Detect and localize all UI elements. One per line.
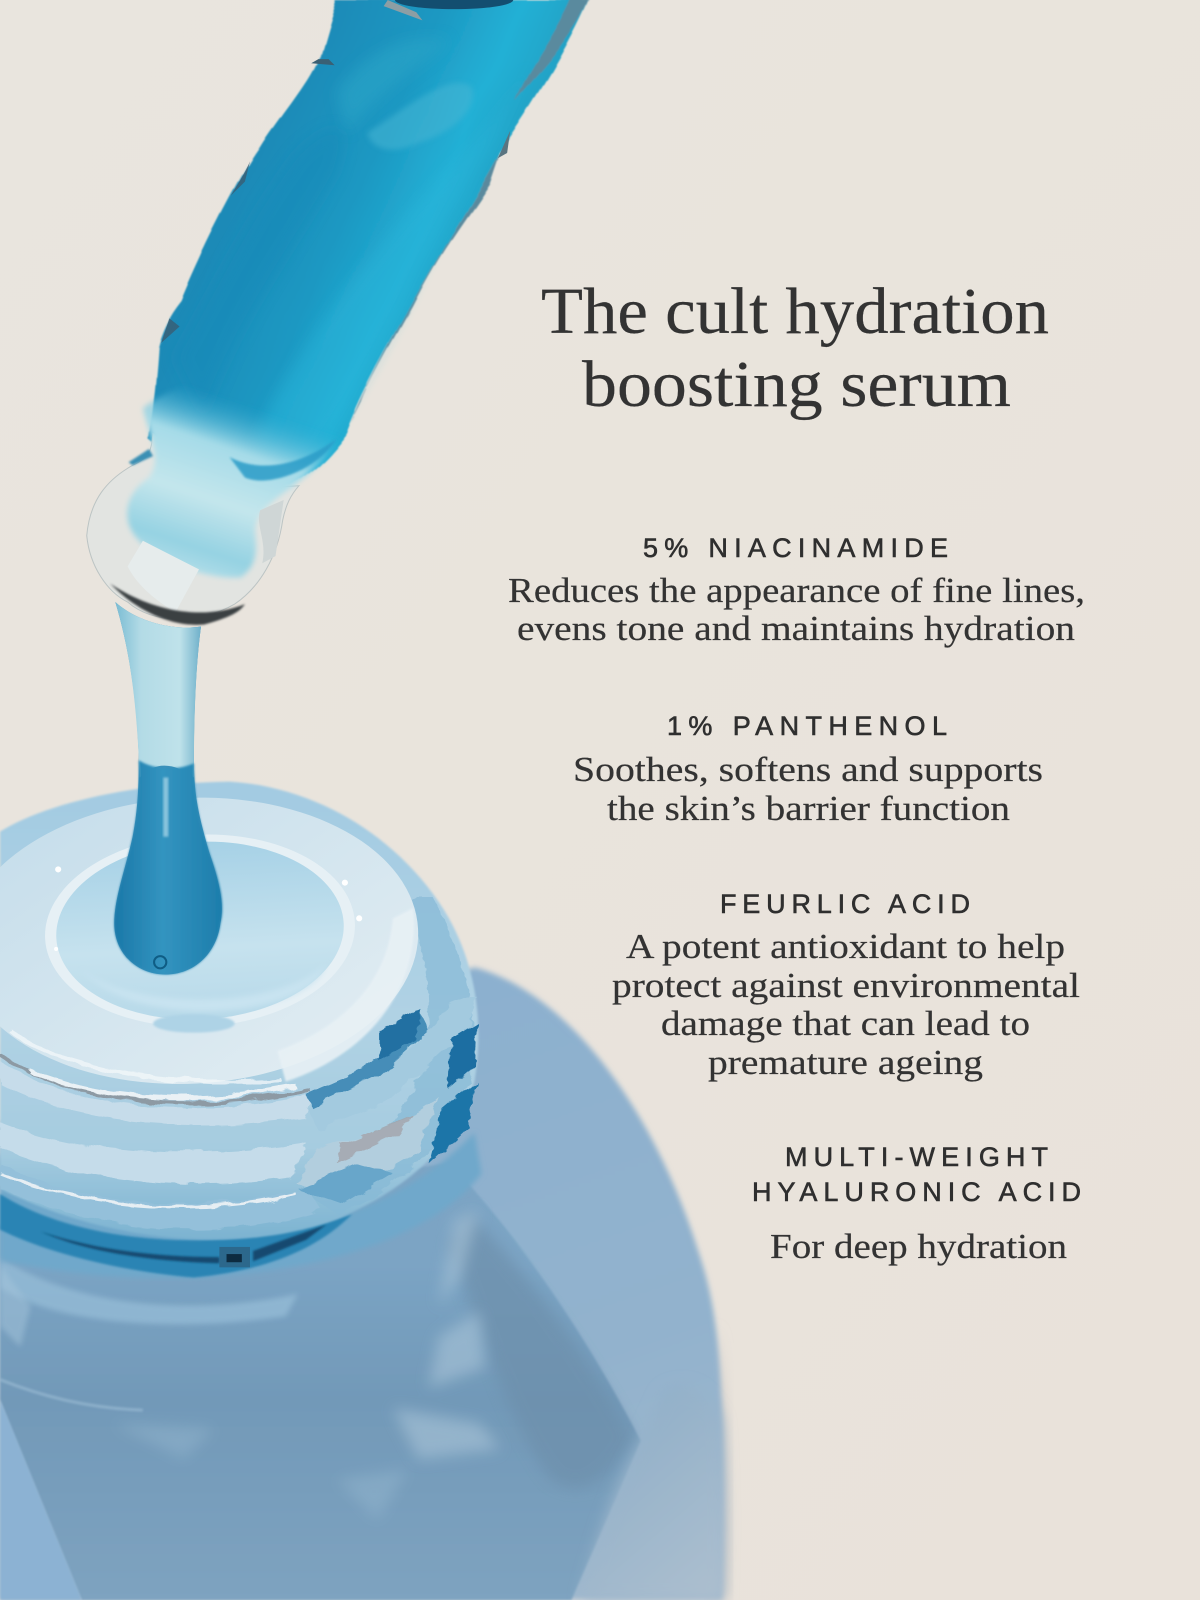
ingredient: ferulic acid [612, 889, 1080, 1082]
title: The cult hydration [541, 275, 1049, 348]
ingredient: multi-weight hyaluronic acid: MULTI-WEIGHT [785, 1142, 1048, 1172]
bottle body [0, 967, 728, 1600]
ingredient: ferulic acid: protect against environmental [612, 966, 1080, 1005]
ingredient: 1% panthenol: the skin’s barrier function [607, 789, 1010, 828]
ingredient: ferulic acid: A potent antioxidant to help [626, 927, 1065, 966]
ingredient: 5% niacinamide: Reduces the appearance of fine lines, [508, 571, 1085, 610]
ingredient: multi-weight hyaluronic acid: HYALURONIC ACID [752, 1177, 1081, 1207]
ingredient: 5% niacinamide: evens tone and maintains hydration [517, 609, 1075, 648]
ingredient: multi-weight hyaluronic acid: For deep hydration [770, 1227, 1067, 1266]
title [541, 275, 1049, 421]
title: boosting serum [582, 348, 1011, 421]
dropper bulb tip [87, 379, 352, 625]
ingredient: ferulic acid: damage that can lead to [661, 1004, 1030, 1043]
glass collar [0, 782, 478, 1239]
ingredient: 1% panthenol [573, 711, 1043, 828]
ingredient: 5% niacinamide [508, 533, 1085, 648]
ingredient: 1% panthenol: Soothes, softens and supports [573, 750, 1043, 789]
ingredient: ferulic acid: premature ageing [708, 1043, 983, 1082]
ingredient: multi-weight hyaluronic acid [752, 1142, 1081, 1266]
collar rim [0, 786, 426, 1095]
ingredient: ferulic acid: FEURLIC ACID [720, 889, 970, 919]
photo: serum bottle and dropper [0, 0, 728, 1600]
ingredient: 1% panthenol: 1% PANTHENOL [667, 711, 947, 741]
serum thread and drop [114, 602, 222, 974]
ingredient: 5% niacinamide: 5% NIACINAMIDE [643, 533, 948, 563]
dropper tube with serum [148, 0, 590, 486]
bottle neck base [0, 1133, 482, 1278]
